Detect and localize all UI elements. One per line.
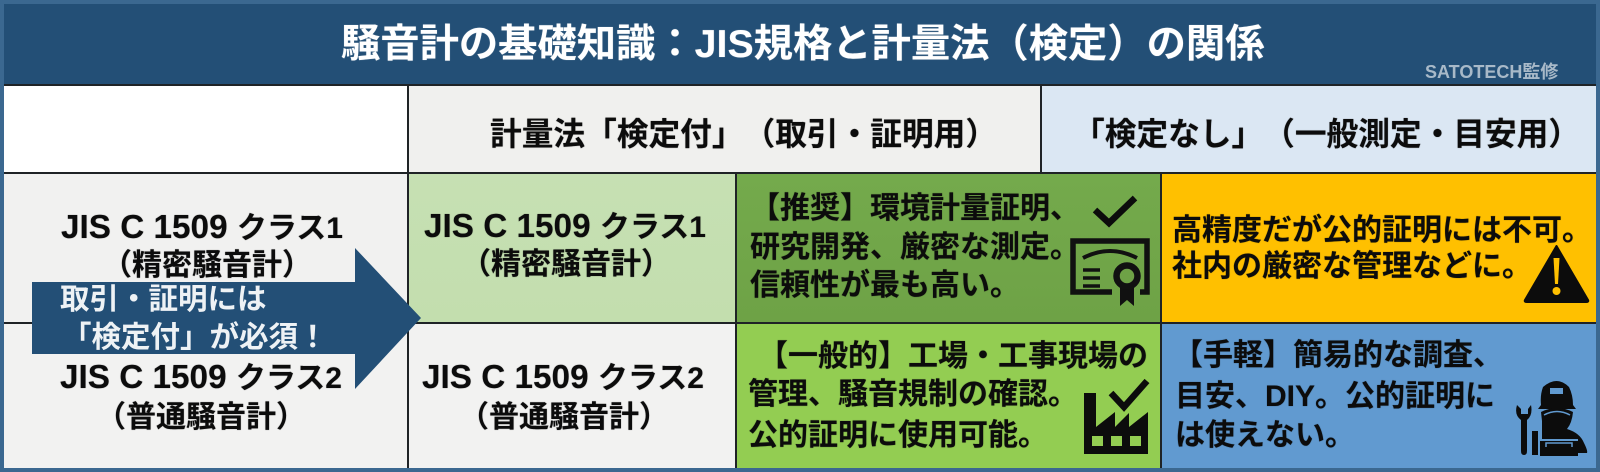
row label: class 1: （精密騒音計）	[102, 249, 312, 282]
supervision credit: SATOTECH監修	[1425, 62, 1558, 82]
cell: casual use	[1161, 323, 1596, 468]
icon: warning triangle	[1524, 245, 1590, 303]
cell: high precision caution: 高精度だが公的証明には不可。	[1172, 214, 1592, 247]
cell: general use: 管理、騒音規制の確認。	[748, 378, 1078, 411]
column header: verified: 計量法「検定付」（取引・証明用）	[490, 116, 997, 152]
column header: verified	[408, 85, 1041, 173]
cell: recommended	[736, 173, 1161, 323]
cell: verified class 1: JIS C 1509 クラス1	[424, 208, 706, 245]
row label: class 2	[4, 323, 408, 468]
column header: unverified	[1041, 85, 1596, 173]
title: 騒音計の基礎知識：JIS規格と計量法（検定）の関係	[341, 22, 1265, 66]
cell: verified class 1: （精密騒音計）	[461, 248, 671, 281]
row label: class 1: JIS C 1509 クラス1	[61, 209, 343, 246]
cell: casual use: 目安、DIY。公的証明に	[1175, 380, 1495, 413]
empty corner cell	[4, 85, 408, 173]
icon: worker with wrench	[1516, 381, 1588, 456]
column header: unverified: 「検定なし」（一般測定・目安用）	[1073, 116, 1580, 152]
cell: casual use: 【手軽】簡易的な調査、	[1173, 339, 1503, 372]
row label: class 1	[4, 173, 408, 323]
cell: general use: 公的証明に使用可能。	[748, 419, 1048, 452]
cell: verified class 2: （普通騒音計）	[459, 401, 669, 434]
title banner	[4, 4, 1596, 85]
cell: recommended: 信頼性が最も高い。	[750, 269, 1020, 302]
arrow text second line: 「検定付」が必須！	[62, 321, 328, 354]
icon: factory with check	[1084, 378, 1150, 454]
cell: recommended: 【推奨】環境計量証明、	[750, 192, 1080, 225]
cell: verified class 2: JIS C 1509 クラス2	[422, 359, 704, 396]
cell: high precision caution: 社内の厳密な管理などに。	[1172, 250, 1532, 283]
cell: verified class 1	[408, 173, 736, 323]
cell: general use	[736, 323, 1161, 468]
row label: class 2: JIS C 1509 クラス2	[60, 359, 342, 396]
icon: certificate	[1070, 238, 1150, 306]
cell: recommended: 研究開発、厳密な測定。	[750, 231, 1080, 264]
row label: class 2: （普通騒音計）	[96, 401, 306, 434]
arrow text: 取引・証明には	[60, 283, 267, 316]
cell: general use: 【一般的】工場・工事現場の	[758, 340, 1148, 373]
cell: casual use: は使えない。	[1175, 419, 1355, 452]
icon: check mark recommended	[1092, 196, 1138, 228]
cell: verified class 2	[408, 323, 736, 468]
cell: high precision caution	[1161, 173, 1596, 323]
